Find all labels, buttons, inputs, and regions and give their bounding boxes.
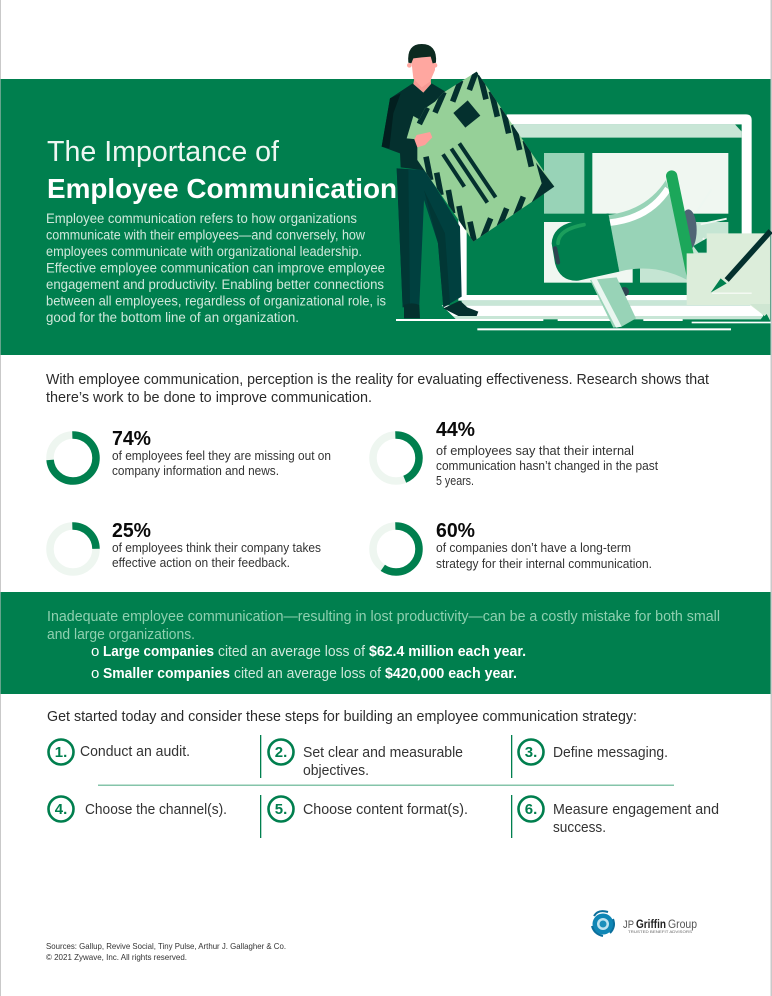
- step 5: Choose content format(s).: [303, 801, 468, 818]
- bullet: smaller companies: o: [91, 665, 99, 682]
- stat: 44%: communication hasn’t changed in the past: [436, 458, 658, 473]
- text block: intro: there’s work to be done to improve communication.: [46, 389, 372, 406]
- stat: 60%: strategy for their internal communication.: [436, 556, 652, 571]
- panel: cost of poor communication: and large organizations.: [47, 626, 195, 643]
- text block: intro: With employee communication, perception is the reality for evaluating effectiveness. Research shows that: [46, 371, 710, 388]
- megaphone: [552, 176, 727, 328]
- person: [382, 44, 478, 318]
- step 2: objectives.: [303, 762, 369, 779]
- step 5: [268, 796, 468, 822]
- bullet: large companies: [91, 643, 526, 660]
- step 6: success.: [553, 819, 606, 836]
- step 6: 6.: [525, 801, 537, 818]
- stat: 60%: [373, 520, 652, 572]
- text block: hero description: [46, 211, 386, 325]
- steps dividers: [98, 735, 674, 838]
- step 3: [518, 740, 668, 764]
- step 6: [518, 796, 719, 836]
- stat: 44%: [373, 419, 658, 488]
- step 1: 1.: [55, 744, 67, 761]
- stat: 74%: company information and news.: [112, 463, 279, 478]
- text block: hero description: communicate with their employees—and conversely, how: [46, 228, 365, 242]
- heading: title: [47, 136, 397, 204]
- text block: hero description: engagement and productivity. Enabling better connections: [46, 277, 384, 292]
- donut chart: 44%: [373, 435, 419, 481]
- text block: intro: [46, 371, 710, 406]
- step 6: Measure engagement and: [553, 801, 719, 818]
- step 4: Choose the channel(s).: [85, 801, 227, 818]
- stat: 74%: of employees feel they are missing out on: [112, 448, 331, 463]
- text block: hero description: Employee communication refers to how organizations: [46, 211, 357, 226]
- donut chart: 60%: [373, 526, 419, 572]
- stat: 60%: of companies don’t have a long-term: [436, 540, 631, 555]
- step 1: Conduct an audit.: [80, 743, 190, 760]
- step 5: 5.: [275, 801, 287, 818]
- heading: title: Employee Communication: [47, 173, 397, 204]
- step 2: 2.: [275, 744, 287, 761]
- logo: JP Griffin Group: [592, 911, 697, 936]
- logo: JP Griffin Group: Group: [668, 919, 697, 931]
- bullet: smaller companies: [91, 665, 517, 682]
- bullet: large companies: o: [91, 643, 99, 660]
- stat: 74%: 74%: [112, 428, 151, 450]
- logo: JP Griffin Group: TRUSTED BENEFIT ADVISORS: [628, 930, 693, 934]
- heading: title: The Importance of: [47, 136, 280, 168]
- laptop: [396, 114, 771, 330]
- bullet: smaller companies: Smaller companies: [103, 665, 230, 682]
- illustration: person with envelope, laptop and megaphone: [382, 44, 771, 330]
- donut chart: 25%: [50, 526, 96, 572]
- stat: 44%: 5 years.: [436, 473, 474, 488]
- stat: 25%: of employees think their company takes: [112, 540, 321, 555]
- step 3: 3.: [525, 744, 537, 761]
- paper and pen: [687, 231, 771, 321]
- donut chart: 74%: [50, 435, 96, 481]
- logo: JP Griffin Group: JP: [623, 919, 634, 931]
- panel: green hero band: [0, 79, 770, 355]
- text block: hero description: Effective employee communication can improve employee: [46, 260, 385, 276]
- text block: sources: [46, 941, 286, 962]
- stat: 25%: 25%: [112, 520, 151, 542]
- step 2: Set clear and measurable: [303, 744, 463, 761]
- envelope: [407, 68, 554, 245]
- stat: 74%: [50, 428, 331, 481]
- bullet: smaller companies: cited an average loss of: [234, 665, 382, 682]
- step 2: [268, 740, 463, 779]
- text block: sources: © 2021 Zywave, Inc. All rights reserved.: [46, 952, 187, 962]
- text block: sources: Sources: Gallup, Revive Social, Tiny Pulse, Arthur J. Gallagher & Co.: [46, 941, 286, 951]
- step 3: Define messaging.: [553, 744, 668, 761]
- logo: JP Griffin Group: Griffin: [636, 919, 666, 931]
- step 1: [48, 740, 190, 764]
- stat: 25%: effective action on their feedback.: [112, 555, 290, 570]
- panel: cost of poor communication: Inadequate employee communication—resulting in lost productivity—can be a costly mistake for both small: [47, 608, 720, 625]
- bullet: large companies: $62.4 million each year.: [369, 643, 526, 660]
- stat: 60%: 60%: [436, 520, 475, 542]
- stat: 44%: 44%: [436, 419, 475, 441]
- step 4: 4.: [55, 801, 67, 818]
- bullet: large companies: Large companies: [103, 643, 214, 660]
- stat: 25%: [50, 520, 321, 572]
- bullet: large companies: cited an average loss of: [218, 643, 366, 660]
- bullet: smaller companies: $420,000 each year.: [385, 665, 517, 682]
- text block: hero description: good for the bottom line of an organization.: [46, 310, 299, 325]
- heading: steps: Get started today and consider these steps for building an employee communication strategy:: [47, 708, 637, 725]
- panel: cost of poor communication: [0, 592, 770, 694]
- stat: 44%: of employees say that their internal: [436, 443, 634, 458]
- text block: hero description: employees communicate with organizational leadership.: [46, 244, 362, 259]
- step 4: [48, 796, 227, 822]
- text block: hero description: between all employees, regardless of organizational role, is: [46, 294, 386, 308]
